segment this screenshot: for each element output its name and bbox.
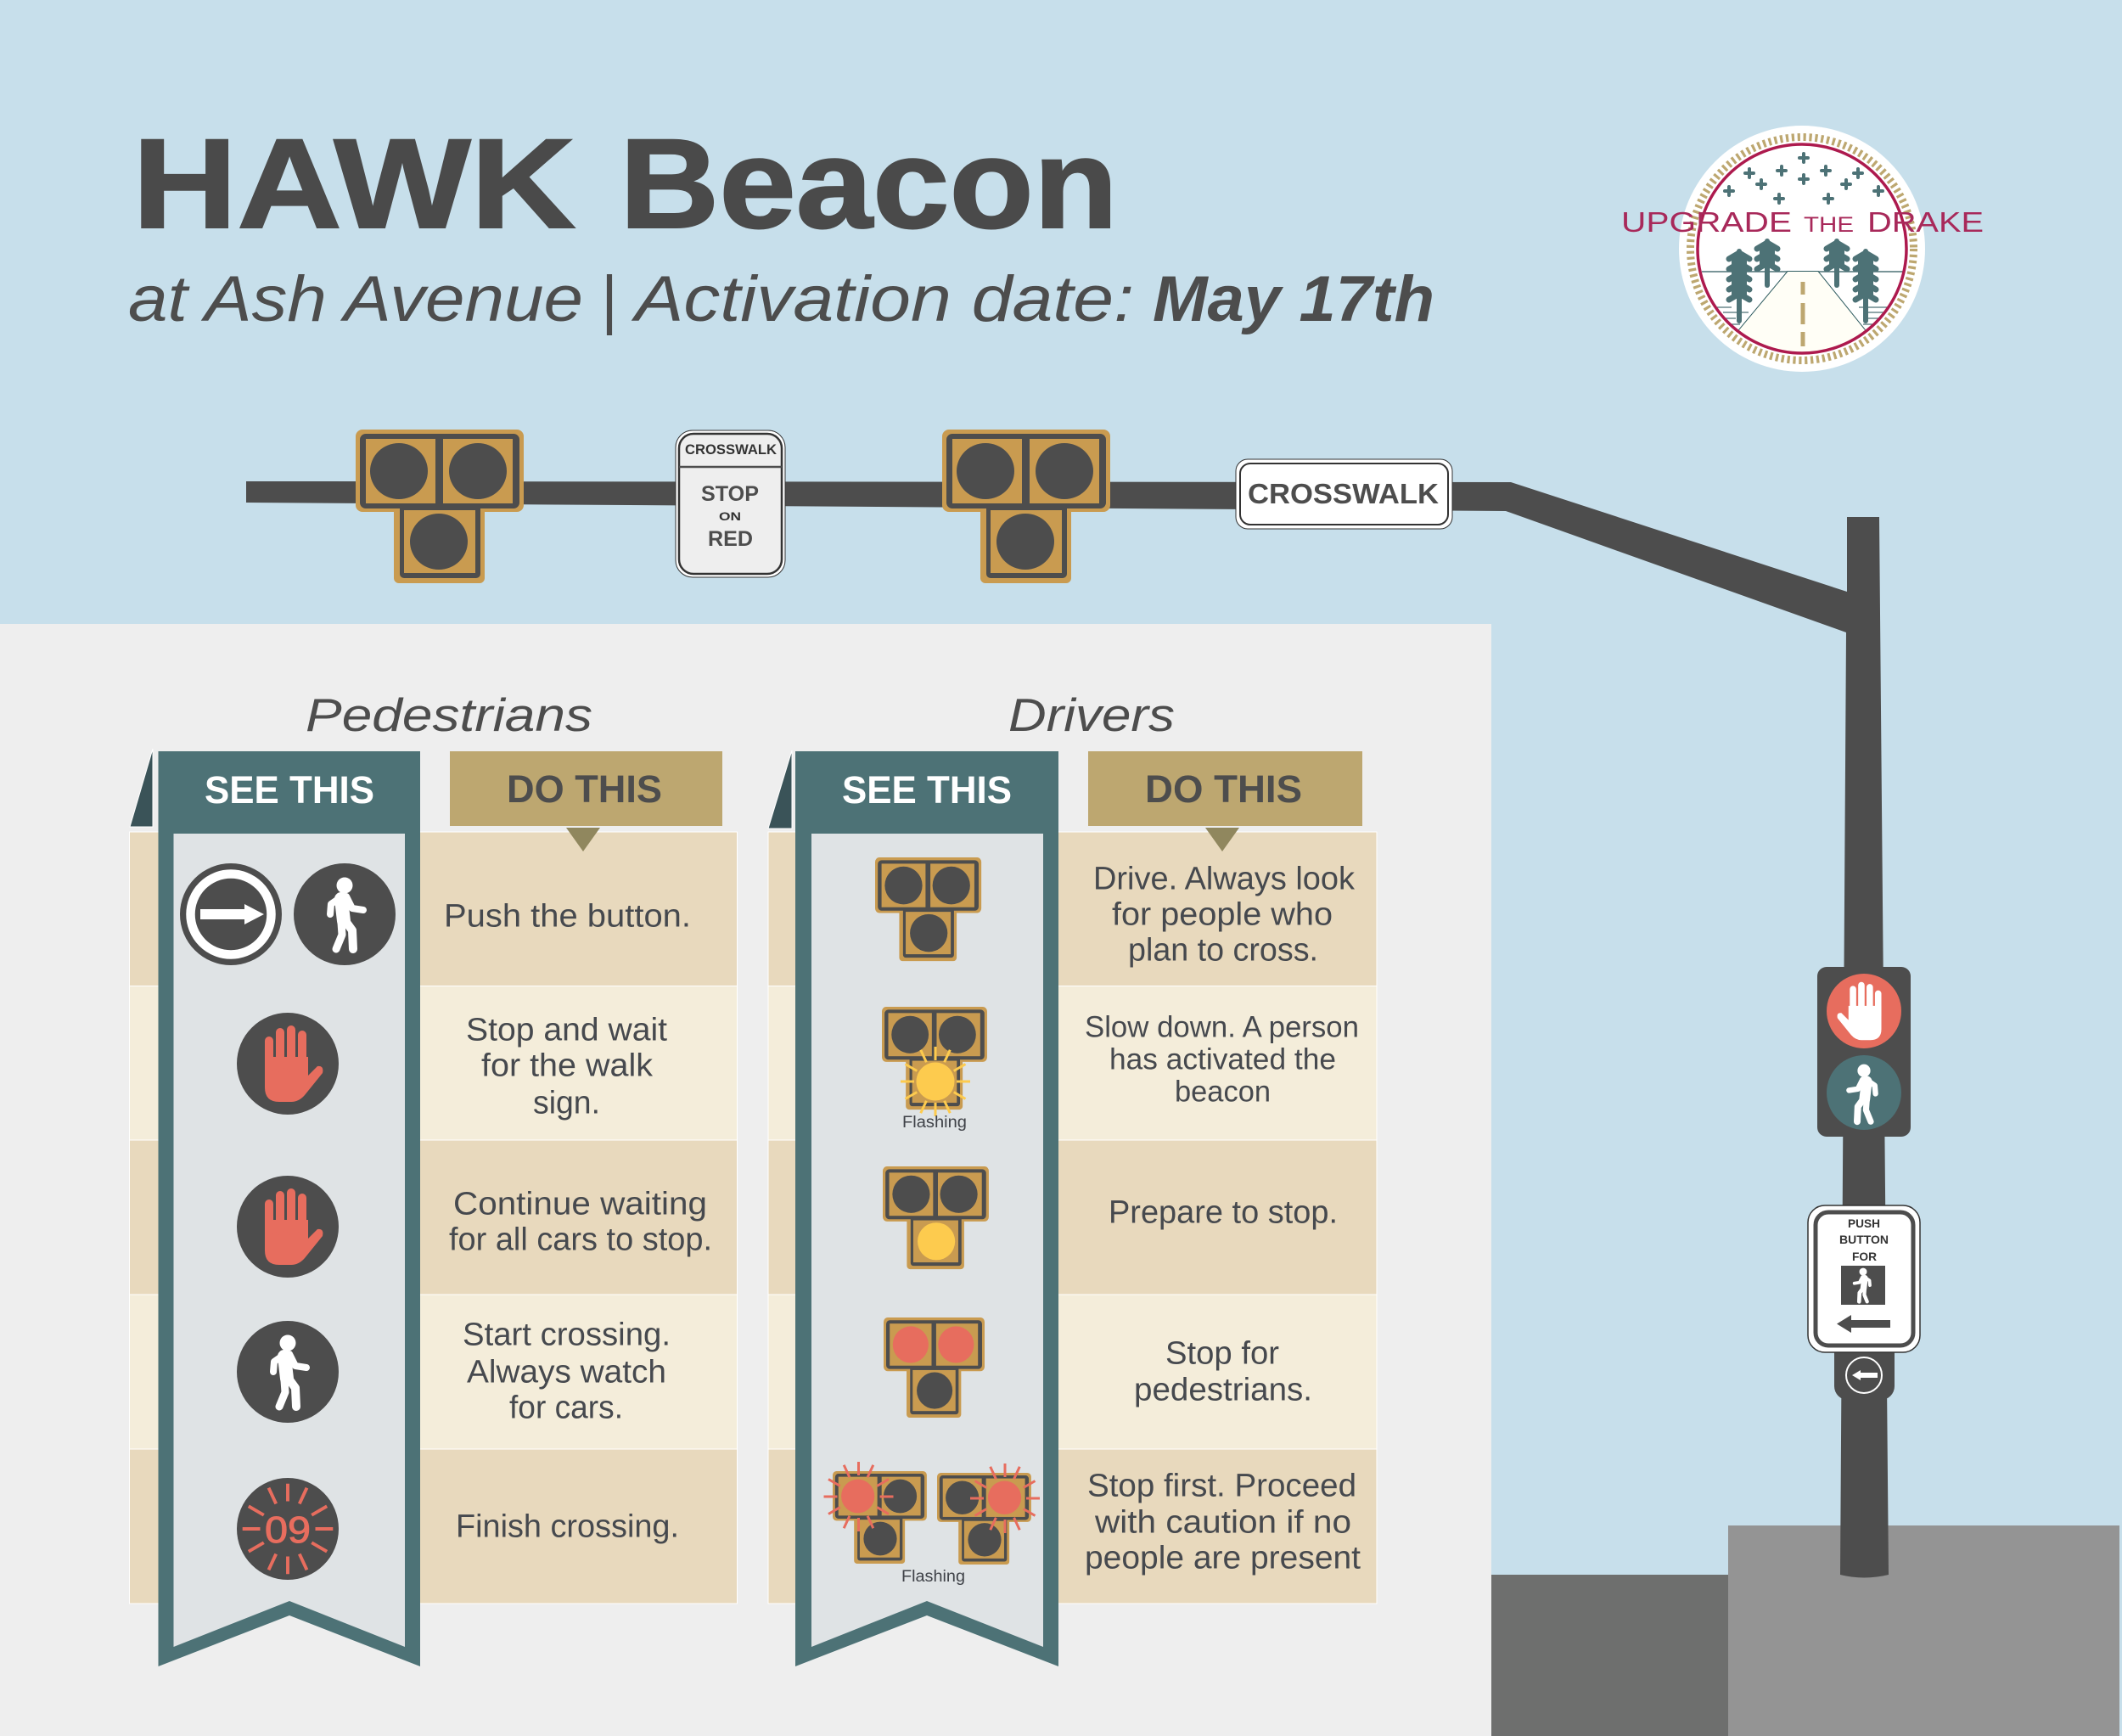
text: stop and wait: for the walk <box>481 1048 654 1083</box>
heading: pedestrians: Pedestrians <box>306 688 592 741</box>
light sidewalk block <box>1728 1525 2119 1736</box>
sign: crosswalk stop on red <box>676 430 785 577</box>
signal: alternating flashing red <box>823 1462 1040 1586</box>
logo: Upgrade the Drake <box>1621 126 1984 372</box>
text: drive: for people who <box>1112 896 1333 932</box>
subtitle: Activation date: <box>631 263 1134 335</box>
subtitle: May 17th <box>1153 263 1434 335</box>
push button sign: FOR <box>1852 1250 1877 1263</box>
text: slow down <box>1085 1010 1359 1109</box>
text: slow down: beacon <box>1175 1075 1271 1109</box>
text: prepare to stop: Prepare to stop. <box>1109 1195 1338 1231</box>
text: stop first <box>1085 1469 1361 1576</box>
see this ribbon: SEE THIS <box>842 768 1012 812</box>
text: stop and wait: sign. <box>533 1085 600 1121</box>
do this header <box>1088 751 1362 851</box>
text: continue waiting: for all cars to stop. <box>449 1222 712 1258</box>
text: stop for pedestrians: Stop for <box>1165 1336 1279 1372</box>
title: Beacon <box>620 112 1118 255</box>
signal: solid red <box>884 1317 985 1418</box>
subtitle: at Ash Avenue <box>128 263 583 335</box>
icon: walking person second <box>237 1321 339 1423</box>
dark ground block <box>1491 1575 1728 1736</box>
sign: crosswalk: CROSSWALK <box>1248 478 1439 509</box>
table rows <box>768 832 1377 1604</box>
sign: crosswalk stop on red: ON <box>719 509 741 523</box>
see this ribbon <box>795 751 1058 1666</box>
subtitle: | <box>600 263 617 335</box>
text: slow down: has activated the <box>1109 1042 1336 1076</box>
text: continue waiting <box>449 1187 712 1258</box>
icon: walking person <box>294 863 396 965</box>
text: start crossing: Start crossing. <box>463 1317 671 1353</box>
see this ribbon: SEE THIS <box>205 768 374 812</box>
signal: all dark <box>875 857 981 961</box>
text: push the button: Push the button. <box>444 898 691 934</box>
do this header: DO THIS <box>1145 767 1302 811</box>
text: start crossing: Always watch <box>467 1355 666 1390</box>
text: stop and wait: Stop and wait <box>466 1012 667 1048</box>
do this header <box>450 751 722 851</box>
signal: alternating flashing red: Flashing <box>901 1568 965 1586</box>
icon: walk lamp <box>1827 1055 1901 1130</box>
text: finish crossing: Finish crossing. <box>456 1509 679 1545</box>
text: stop for pedestrians: pedestrians. <box>1134 1372 1312 1407</box>
text: continue waiting: Continue waiting <box>453 1187 707 1222</box>
signal: solid yellow <box>883 1166 989 1269</box>
text: stop and wait <box>466 1012 667 1121</box>
icon: stop hand <box>237 1013 339 1115</box>
text: stop first: with caution if no <box>1094 1504 1351 1540</box>
see this ribbon <box>158 751 420 1666</box>
logo: Upgrade the Drake: DRAKE <box>1867 206 1984 238</box>
icon: countdown 09 <box>237 1478 339 1580</box>
overhead signal right <box>942 430 1110 583</box>
table rows <box>129 832 737 1604</box>
signal: flashing yellow <box>882 1007 987 1132</box>
pedestrian signal head <box>1817 967 1911 1137</box>
do this header: DO THIS <box>507 767 662 811</box>
sign: crosswalk stop on red: RED <box>708 527 753 551</box>
icon: stop hand second <box>237 1176 339 1278</box>
signal: flashing yellow: Flashing <box>902 1114 967 1132</box>
push button sign <box>1808 1205 1920 1400</box>
ribbon fold <box>130 749 153 827</box>
sign: crosswalk stop on red: STOP <box>701 482 759 506</box>
subtitle <box>128 263 1434 335</box>
text: drive: plan to cross. <box>1128 932 1318 968</box>
logo: Upgrade the Drake: UPGRADE <box>1621 206 1792 238</box>
text: drive <box>1093 861 1356 968</box>
ribbon fold <box>768 750 792 829</box>
text: stop first: people are present <box>1085 1540 1361 1576</box>
text: slow down: Slow down. A person <box>1085 1010 1359 1044</box>
icon: push button arrow <box>180 863 282 965</box>
overhead signal left <box>356 430 524 583</box>
icon: countdown 09: 09 <box>265 1509 311 1551</box>
sign: crosswalk <box>1236 459 1452 529</box>
title: HAWK <box>132 112 575 255</box>
heading: drivers: Drivers <box>1008 688 1175 741</box>
text: start crossing <box>463 1317 671 1426</box>
overhead mast arm and pole <box>246 481 1889 1577</box>
push button sign: PUSH <box>1848 1216 1880 1230</box>
panel: drivers <box>768 688 1377 1666</box>
push button sign: BUTTON <box>1839 1233 1889 1246</box>
text: stop for pedestrians <box>1134 1336 1312 1407</box>
title <box>132 112 1118 255</box>
icon: red hand lamp <box>1827 974 1901 1048</box>
lower grey panel <box>0 624 1491 1736</box>
panel: pedestrians <box>129 688 737 1666</box>
text: drive: Drive. Always look <box>1093 861 1356 896</box>
text: start crossing: for cars. <box>509 1390 623 1426</box>
sign: crosswalk stop on red: CROSSWALK <box>685 441 778 458</box>
text: stop first: Stop first. Proceed <box>1087 1469 1356 1504</box>
logo: Upgrade the Drake: THE <box>1804 213 1854 237</box>
